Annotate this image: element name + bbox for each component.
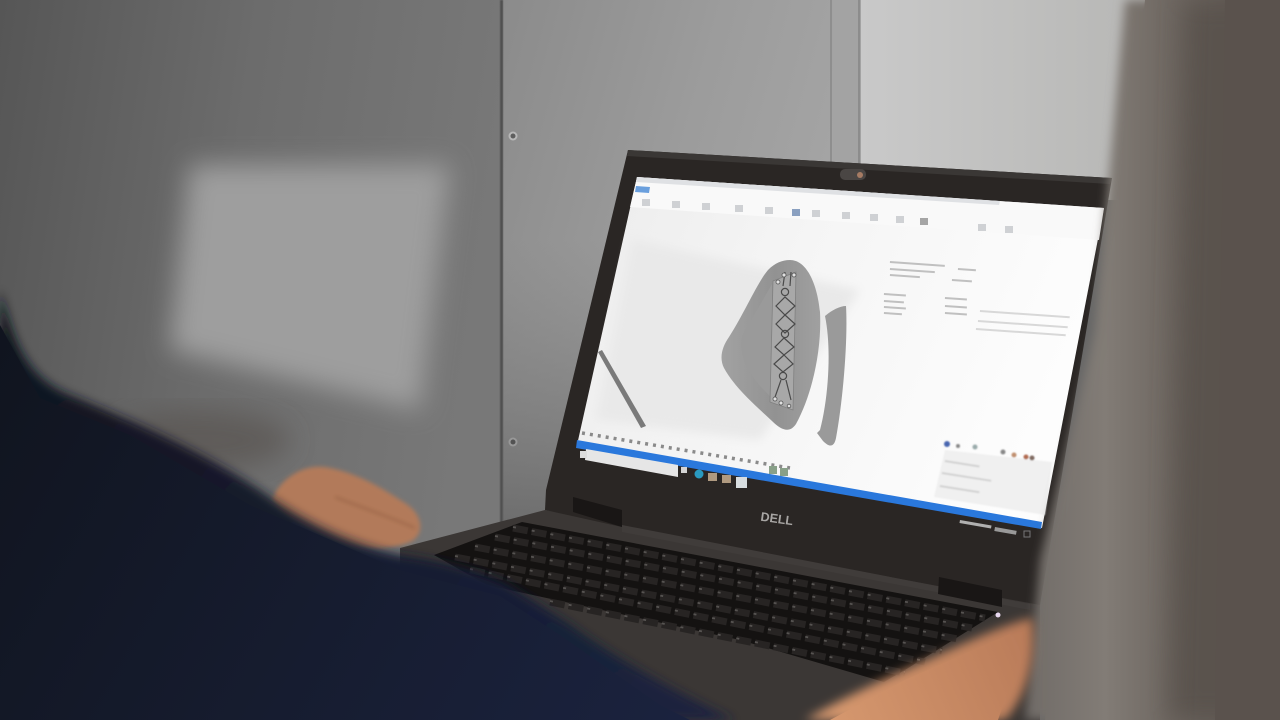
keyboard bbox=[434, 522, 998, 682]
hinge details bbox=[573, 497, 1002, 607]
person: navy sweater bbox=[0, 290, 735, 720]
wall: right panels bbox=[830, 0, 1161, 200]
3D model: rounded triangular part bbox=[722, 260, 820, 430]
right foreground post bbox=[1025, 0, 1280, 720]
viewport tool strip bbox=[582, 433, 790, 476]
wall: left metal panel bbox=[0, 0, 503, 720]
DELL logo: DELL bbox=[760, 510, 794, 528]
laptop lid bbox=[545, 150, 1112, 605]
wall: middle metal panel bbox=[503, 0, 833, 720]
hinge front lip bbox=[622, 525, 1030, 610]
laptop base and keyboard deck bbox=[400, 510, 1040, 720]
keyboard status light bbox=[996, 612, 1000, 618]
screen bbox=[577, 177, 1104, 528]
3D model: curved side part bbox=[817, 306, 846, 446]
application ribbon bbox=[630, 177, 1104, 240]
inner recess bbox=[741, 284, 772, 398]
laptop bbox=[400, 150, 1112, 720]
diagonal edge in the viewport bbox=[598, 350, 646, 428]
person: left hand bbox=[272, 467, 420, 548]
windows taskbar bbox=[580, 449, 1030, 537]
panel seam and screws bbox=[500, 0, 518, 530]
properties panel bbox=[884, 261, 1070, 336]
lattice rib bbox=[770, 272, 796, 410]
blue status bar bbox=[576, 440, 1042, 529]
webcam bbox=[840, 169, 866, 180]
viewport floor shading bbox=[596, 240, 860, 440]
person: right hand bbox=[805, 618, 1033, 720]
lower right tool palette bbox=[934, 441, 1052, 515]
laptop top edge highlight bbox=[627, 150, 1112, 184]
